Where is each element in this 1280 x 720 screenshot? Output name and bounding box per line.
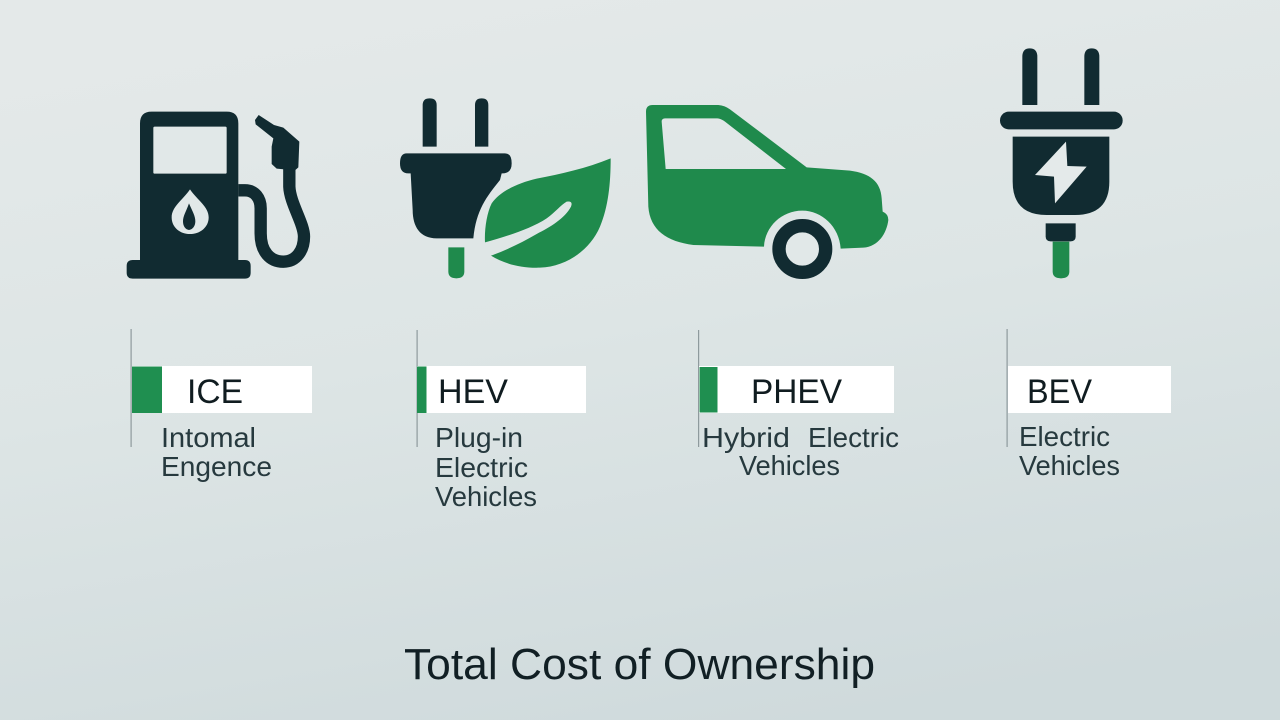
icon: plug with leaf xyxy=(400,98,611,278)
panel: ICE xyxy=(130,329,312,482)
description: ICE: Engence xyxy=(161,451,272,482)
description: BEV: Electric xyxy=(1019,421,1110,452)
description: PHEV: Hybrid xyxy=(702,422,790,453)
description: PHEV: Electric xyxy=(808,422,899,453)
description: PHEV: Vehicles xyxy=(739,450,840,481)
panel: HEV xyxy=(416,330,586,512)
icon: fuel pump xyxy=(127,112,304,279)
description: HEV: Electric xyxy=(435,452,528,483)
description: ICE: Intomal xyxy=(161,422,256,453)
description: BEV: Vehicles xyxy=(1019,450,1120,481)
description: HEV: Vehicles xyxy=(435,481,537,512)
label: PHEV: PHEV xyxy=(751,373,842,411)
title: Total Cost of Ownership xyxy=(404,640,875,689)
panel: PHEV xyxy=(698,330,899,481)
label: ICE: ICE xyxy=(187,373,243,411)
label: BEV: BEV xyxy=(1027,373,1092,411)
icon: electric plug with bolt xyxy=(1000,48,1123,278)
icon: car xyxy=(646,105,888,272)
description: HEV: Plug-in xyxy=(435,422,523,453)
label: HEV: HEV xyxy=(438,373,508,411)
panel: BEV xyxy=(1006,329,1171,481)
